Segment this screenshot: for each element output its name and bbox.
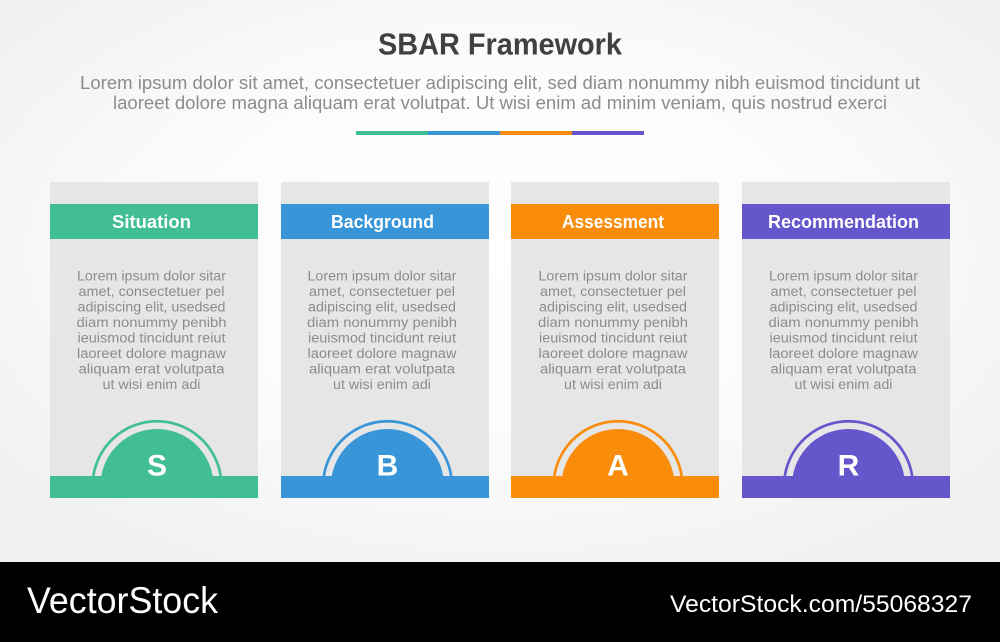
panel background: [742, 182, 950, 498]
text block: Lorem ipsum dolor sitar: [769, 268, 919, 284]
text block: [768, 268, 919, 392]
text block: diam nonummy penibh: [76, 315, 226, 330]
panel background: [50, 182, 258, 498]
badge: A semicircle: [511, 421, 719, 498]
VectorStock logo text: VectorStock: [27, 580, 218, 621]
text block: adipiscing elit, usedsed: [78, 300, 226, 314]
subtitle text: [80, 73, 920, 113]
text block: laoreet dolore magnaw: [769, 346, 918, 361]
text block: laoreet dolore magnaw: [308, 346, 457, 361]
text block: [76, 268, 227, 392]
title: SBAR Framework: [378, 26, 623, 62]
text block: amet, consectetuer pel: [309, 284, 455, 299]
text block: aliquam erat volutpata: [540, 362, 687, 376]
header: Assessment: [511, 204, 719, 239]
header: Background: [281, 204, 489, 239]
panel: Recommendation: [742, 182, 950, 498]
panel: Background: [281, 182, 489, 498]
header: Recommendation: Recommendation: [768, 211, 919, 232]
panel: Situation: [50, 182, 258, 498]
title underline in four colours: [356, 131, 644, 135]
text block: amet, consectetuer pel: [540, 284, 686, 299]
panel background: [511, 182, 719, 498]
badge: S semicircle: S: [147, 450, 167, 482]
text block: adipiscing elit, usedsed: [539, 300, 687, 314]
text block: adipiscing elit, usedsed: [770, 300, 918, 314]
badge: B semicircle: B: [377, 450, 398, 482]
text block: ieuismod tincidunt reiut: [770, 330, 918, 346]
watermark footer bar: [0, 562, 1000, 642]
text block: [538, 268, 688, 392]
badge: R semicircle: [742, 421, 950, 498]
text block: ut wisi enim adi: [794, 377, 892, 392]
text block: Lorem ipsum dolor sitar: [538, 268, 688, 284]
text block: laoreet dolore magnaw: [77, 346, 226, 361]
text block: amet, consectetuer pel: [770, 284, 916, 299]
text block: Lorem ipsum dolor sitar: [77, 268, 227, 284]
text block: ut wisi enim adi: [102, 377, 200, 392]
text block: [307, 268, 457, 392]
text block: diam nonummy penibh: [307, 315, 457, 330]
subtitle text: laoreet dolore magna aliquam erat volutpat. Ut wisi enim ad minim veniam, quis nostrud exerci: [113, 93, 887, 113]
text block: aliquam erat volutpata: [770, 362, 917, 376]
panel: Assessment: [511, 182, 719, 498]
VectorStock image URL text: VectorStock.com/55068327: [670, 591, 972, 618]
text block: diam nonummy penibh: [538, 315, 688, 330]
text block: aliquam erat volutpata: [309, 362, 456, 376]
text block: diam nonummy penibh: [768, 315, 918, 330]
badge: R semicircle: R: [838, 450, 860, 482]
text block: ut wisi enim adi: [333, 377, 431, 392]
text block: adipiscing elit, usedsed: [308, 300, 456, 314]
text block: aliquam erat volutpata: [78, 362, 225, 376]
subtitle text: Lorem ipsum dolor sit amet, consectetuer adipiscing elit, sed diam nonummy nibh euismod tincidunt ut: [80, 73, 920, 93]
header: Assessment: Assessment: [562, 211, 664, 232]
text block: ieuismod tincidunt reiut: [539, 330, 687, 346]
panel background: [281, 182, 489, 498]
header: Situation: [50, 204, 258, 239]
header: Recommendation: [742, 204, 950, 239]
header: Situation: Situation: [112, 211, 191, 232]
badge: A semicircle: A: [607, 450, 629, 482]
text block: laoreet dolore magnaw: [538, 346, 688, 361]
text block: ieuismod tincidunt reiut: [78, 330, 226, 346]
text block: Lorem ipsum dolor sitar: [308, 268, 457, 284]
text block: ut wisi enim adi: [564, 377, 662, 392]
text block: ieuismod tincidunt reiut: [308, 330, 456, 346]
badge: S semicircle: [50, 421, 258, 498]
header: Background: Background: [331, 211, 434, 232]
text block: amet, consectetuer pel: [78, 284, 224, 299]
badge: B semicircle: [281, 421, 489, 498]
